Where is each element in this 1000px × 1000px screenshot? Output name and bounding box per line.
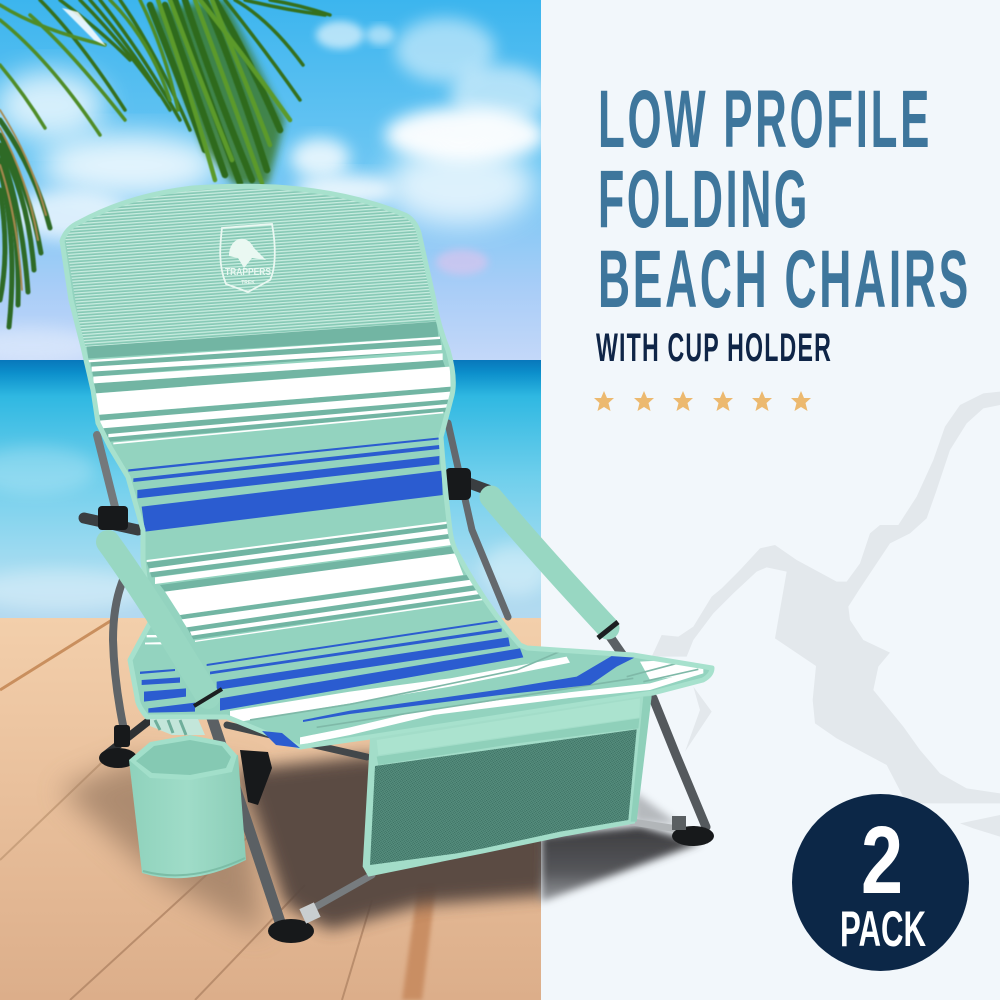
palm fronds top	[0, 0, 330, 183]
headrest weave	[66, 188, 436, 347]
2 pack badge	[792, 794, 969, 971]
palm frond left	[0, 110, 50, 327]
right panel background	[541, 0, 1000, 1000]
right strut	[632, 822, 684, 830]
pink cloud patch	[436, 249, 488, 275]
cup holder	[129, 735, 246, 878]
product: folding beach chair	[55, 175, 714, 943]
strut	[310, 875, 372, 910]
upper stripes	[87, 322, 451, 532]
fabric body	[62, 186, 712, 747]
upper-right arm tube	[604, 628, 640, 680]
blue stripes upper	[128, 437, 443, 532]
right arm tube end	[455, 478, 488, 490]
sea shimmer	[0, 446, 549, 610]
clouds	[0, 18, 550, 363]
wooden deck	[0, 618, 541, 1000]
beach photo backdrop	[0, 0, 550, 1000]
right-front leg	[653, 698, 706, 827]
underside fabric	[150, 719, 300, 748]
deck planks	[0, 620, 372, 1000]
organizer pocket	[363, 695, 652, 877]
sky	[0, 0, 541, 362]
logo badge: TRAPPERS	[225, 267, 271, 278]
left arm pad	[108, 542, 208, 697]
logo badge: TREK	[241, 280, 255, 286]
back-left lower leg	[113, 580, 123, 725]
subheading: WITH CUP HOLDER	[596, 326, 832, 370]
deck shadow	[240, 755, 550, 930]
rear strut	[104, 720, 150, 756]
front-left leg	[207, 703, 281, 925]
heading: FOLDING	[598, 154, 810, 245]
star rating	[594, 391, 811, 411]
2 pack badge: 2	[861, 807, 903, 914]
left pad end	[194, 689, 222, 706]
logo badge	[220, 224, 275, 292]
left arm tube	[84, 518, 138, 530]
right arm pad	[491, 497, 608, 628]
back-left upper tube	[97, 435, 115, 507]
left deck shade	[60, 760, 262, 935]
palm mass	[150, 0, 285, 185]
seat stripes	[230, 650, 703, 745]
rear cross bar	[227, 725, 367, 757]
mountain watermark	[652, 392, 1000, 837]
fabric binding	[62, 186, 712, 747]
chair shadow on right panel	[541, 826, 700, 902]
palm highlight	[62, 8, 106, 46]
sea	[0, 360, 541, 620]
lower stripes	[140, 522, 523, 713]
2 pack badge: PACK	[840, 901, 926, 957]
deck seam	[402, 885, 436, 1000]
right back tube	[448, 423, 508, 617]
chair feet and joints	[98, 468, 714, 943]
chair frame	[84, 423, 706, 925]
leg shadow gradient	[632, 790, 680, 825]
heading	[598, 74, 971, 325]
fabric stripes	[55, 175, 703, 745]
right pad end	[598, 622, 618, 638]
